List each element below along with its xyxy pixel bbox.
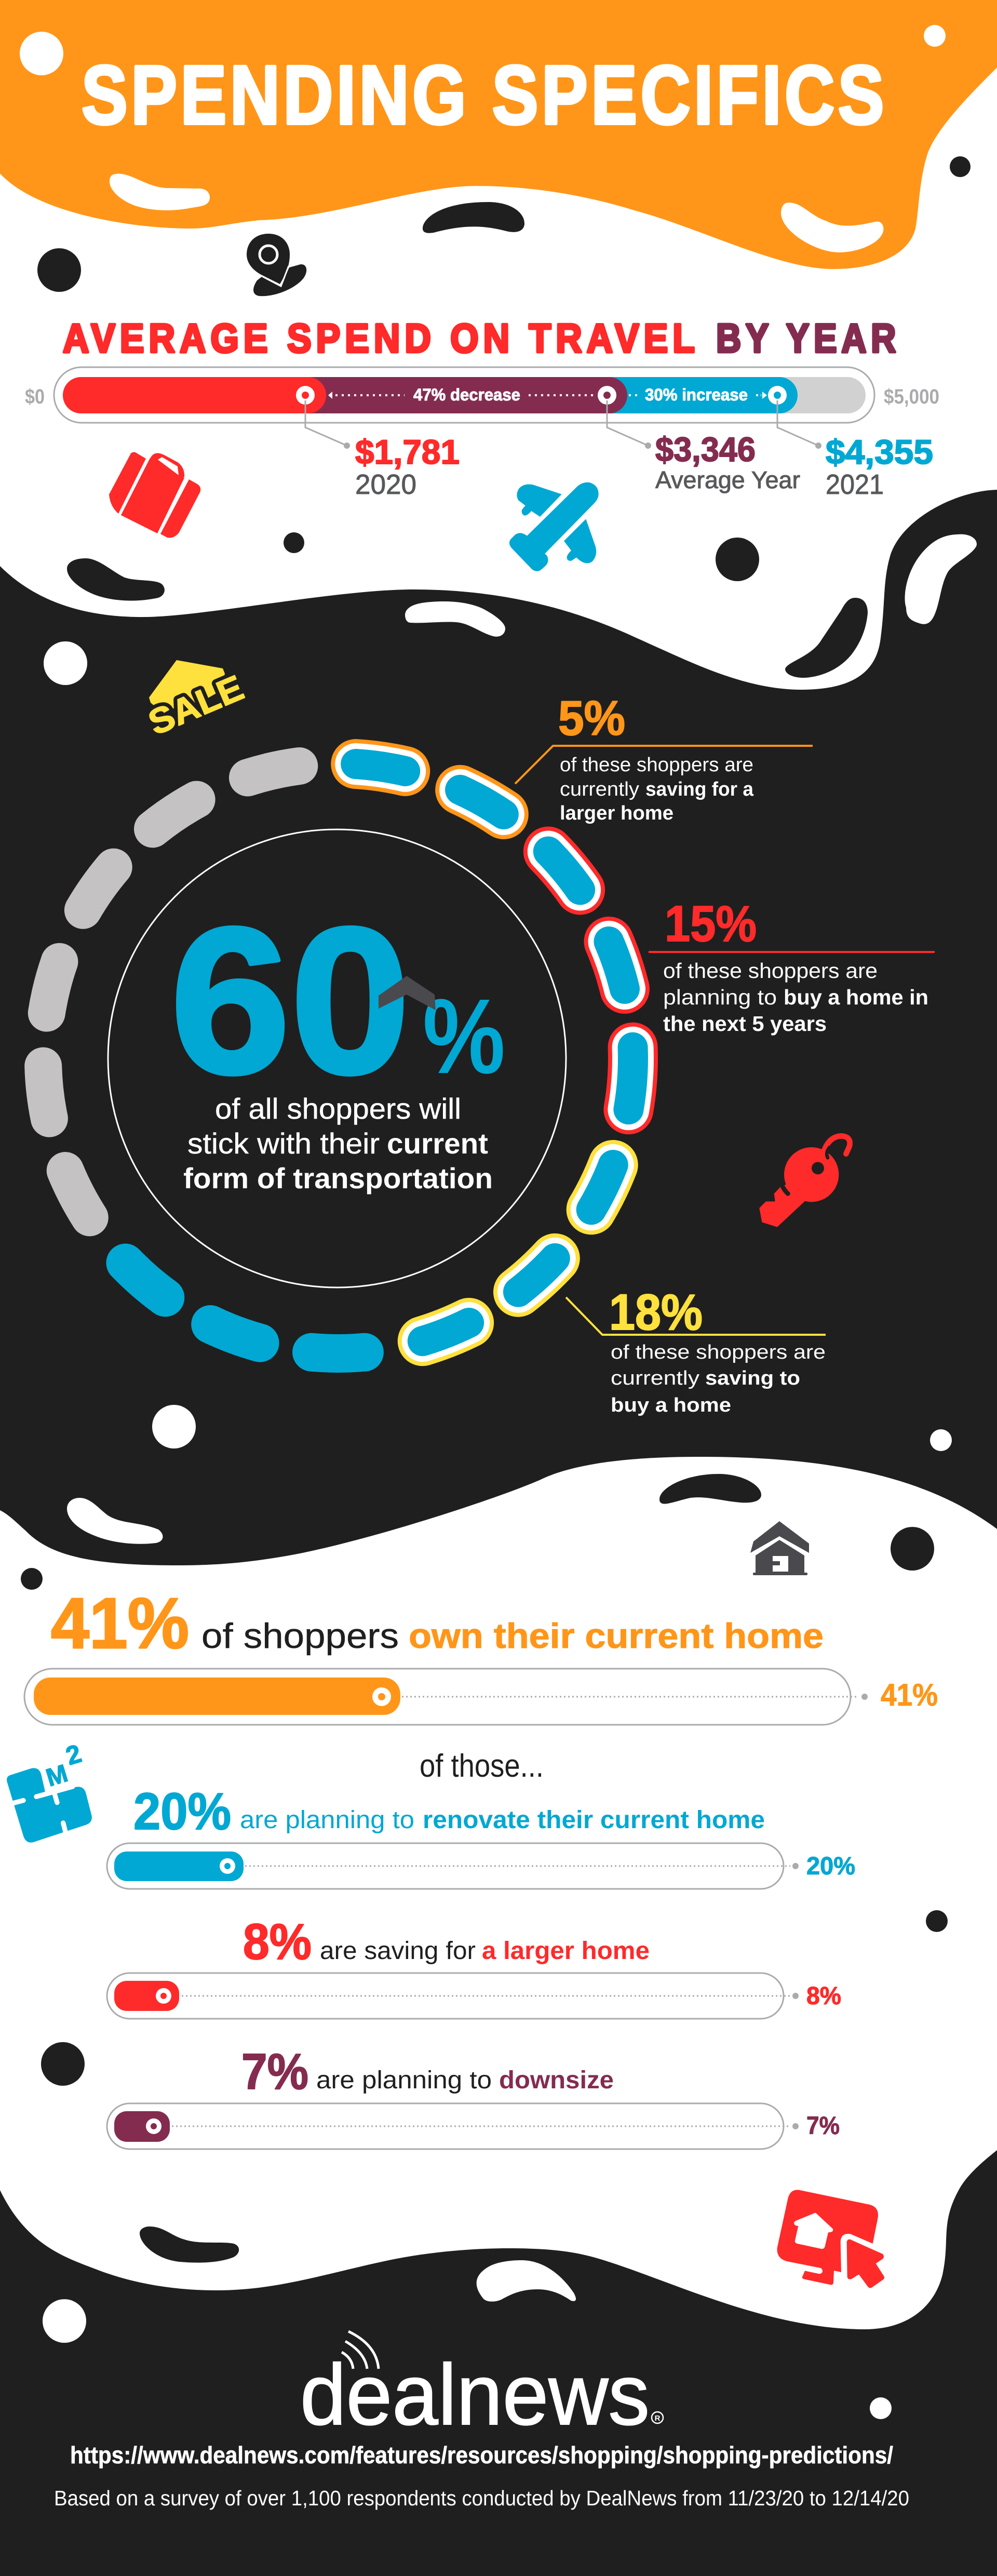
chart: 20 percent bar: 20% (806, 1853, 855, 1880)
decorative black shapes lower white section (21, 1474, 948, 2086)
heading: 7 percent downsize: downsize (499, 2067, 614, 2094)
heading: 8 percent larger home: 8% (243, 1913, 312, 1970)
chart: 8 percent bar (107, 1973, 841, 2019)
callout: 15 percent: planning to (663, 985, 777, 1009)
icon: sale tag: SALE (143, 668, 249, 743)
survey note: Based on a survey of over 1,100 respondents conducted by DealNews from 11/23/20 to 12/14/20 (54, 2486, 909, 2510)
callout: 5 percent: 5% (558, 691, 625, 745)
callout: 5 percent: of these shoppers are (560, 754, 753, 776)
callout: 18 percent (566, 1284, 826, 1416)
callout: 15 percent: 15% (665, 895, 757, 952)
icon: house (750, 1521, 809, 1575)
callout: 18 percent: currently (611, 1367, 699, 1389)
heading: 8 percent larger home (243, 1913, 650, 1970)
icon: sale tag: SALE (143, 668, 249, 743)
decorative black shapes (37, 156, 971, 601)
heading: 20 percent renovate: are planning to (240, 1806, 414, 1834)
heading: average spend on travel by year: AVERAGE SPEND ON TRAVEL (63, 315, 699, 361)
heading: 8 percent larger home: are saving for (320, 1937, 476, 1965)
icon: suitcase (109, 452, 200, 538)
value: 2020 (355, 433, 460, 500)
callout: 18 percent: buy a home (611, 1394, 731, 1416)
chart: travel spend bar: 30% increase (645, 385, 748, 404)
logo: dealnews: R (655, 2414, 661, 2423)
gray segments (42, 765, 299, 1218)
icon: square metre floor plan: 2 (62, 1739, 85, 1770)
text: 60 percent description: current (387, 1127, 488, 1160)
value: 2021: $4,355 (826, 433, 933, 471)
text: 60 percent description: of all shoppers will (215, 1092, 461, 1125)
heading: 20 percent renovate: 20% (133, 1782, 231, 1841)
orange outlined segments (356, 763, 504, 814)
chart: 7 percent bar (107, 2103, 840, 2149)
callout: 5 percent (515, 691, 813, 824)
icon: map pin (247, 234, 306, 296)
heading: 41 percent own their home: 41% (51, 1584, 189, 1663)
chart: dashed donut 60 percent (42, 763, 635, 1353)
chart: 20 percent bar (107, 1843, 855, 1889)
heading: 41 percent own their home: own their current home (409, 1616, 824, 1656)
inner circle outline (108, 829, 566, 1287)
text: of those: of those... (420, 1748, 544, 1784)
callout: 18 percent: saving to (705, 1367, 800, 1389)
heading: average spend on travel by year: BY YEAR (716, 315, 900, 361)
heading: 7 percent downsize: 7% (241, 2043, 308, 2100)
logo: dealnews: dealnews (300, 2347, 650, 2443)
value: average year: $3,346 (655, 430, 756, 468)
chart: travel spend bar (54, 367, 874, 449)
chart: 41 percent bar (24, 1669, 938, 1725)
panel: orange header blob (0, 0, 997, 269)
callout: 5 percent: currently (560, 779, 639, 800)
callout: 5 percent: larger home (560, 802, 673, 824)
callout: 18 percent: 18% (609, 1284, 703, 1340)
icon: key (759, 1136, 850, 1227)
label: $5,000: $5,000 (884, 385, 939, 408)
callout: 5 percent: saving for a (645, 779, 754, 800)
panel: dark footer (0, 2150, 997, 2576)
icon: square metre floor plan: M (43, 1759, 71, 1792)
big number: 60% (170, 884, 505, 1117)
chart: travel spend bar: 47% decrease (413, 385, 520, 404)
value: average year (655, 430, 800, 493)
text: 60 percent description: stick with their (187, 1127, 380, 1160)
label: $0: $0 (25, 385, 45, 408)
value: 2020: 2020 (355, 469, 416, 500)
decorative white shapes on dark section (44, 534, 977, 1544)
callout: 15 percent: the next 5 years (663, 1012, 827, 1036)
heading: 7 percent downsize (241, 2043, 614, 2100)
value: 2020: $1,781 (355, 433, 460, 471)
heading: 8 percent larger home: a larger home (482, 1937, 650, 1965)
red outlined segments (548, 851, 635, 1109)
value: 2021 (826, 433, 933, 500)
heading: 7 percent downsize: are planning to (316, 2067, 492, 2094)
chart: 8 percent bar: 8% (806, 1982, 841, 2010)
value: 2021: 2021 (826, 469, 884, 500)
text: 60 percent description: form of transportation (183, 1162, 493, 1195)
icon: airplane (509, 482, 599, 571)
heading: 20 percent renovate: renovate their current home (423, 1806, 765, 1834)
decorative shapes around footer (43, 2226, 892, 2419)
callout: 15 percent: buy a home in (784, 985, 928, 1009)
icon: online home screen (777, 2190, 884, 2288)
panel: dark section (0, 490, 997, 1565)
value: average year: Average Year (655, 466, 800, 493)
decorative black shape on white (785, 598, 868, 678)
heading: 20 percent renovate (133, 1782, 765, 1841)
callout: 15 percent: of these shoppers are (663, 959, 878, 983)
yellow outlined segments (423, 1165, 614, 1342)
chart: 41 percent bar: 41% (881, 1678, 938, 1712)
source url: https://www.dealnews.com/features/resources/shopping/shopping-predictions/ (70, 2441, 893, 2468)
heading: 41 percent own their home (51, 1584, 824, 1663)
icon: square metre floor plan (5, 1739, 92, 1843)
big number: 60%: % (423, 977, 505, 1096)
chart: 7 percent bar: 7% (806, 2112, 840, 2140)
callout: 15 percent (649, 895, 935, 1036)
heading: 41 percent own their home: of shoppers (201, 1616, 399, 1656)
callout: 18 percent: of these shoppers are (611, 1341, 826, 1363)
text: 60 percent description (183, 1092, 493, 1195)
plain blue segments (125, 1263, 365, 1353)
icon: house roof chevron (379, 976, 436, 1010)
big number: 60%: 60 (170, 884, 410, 1117)
